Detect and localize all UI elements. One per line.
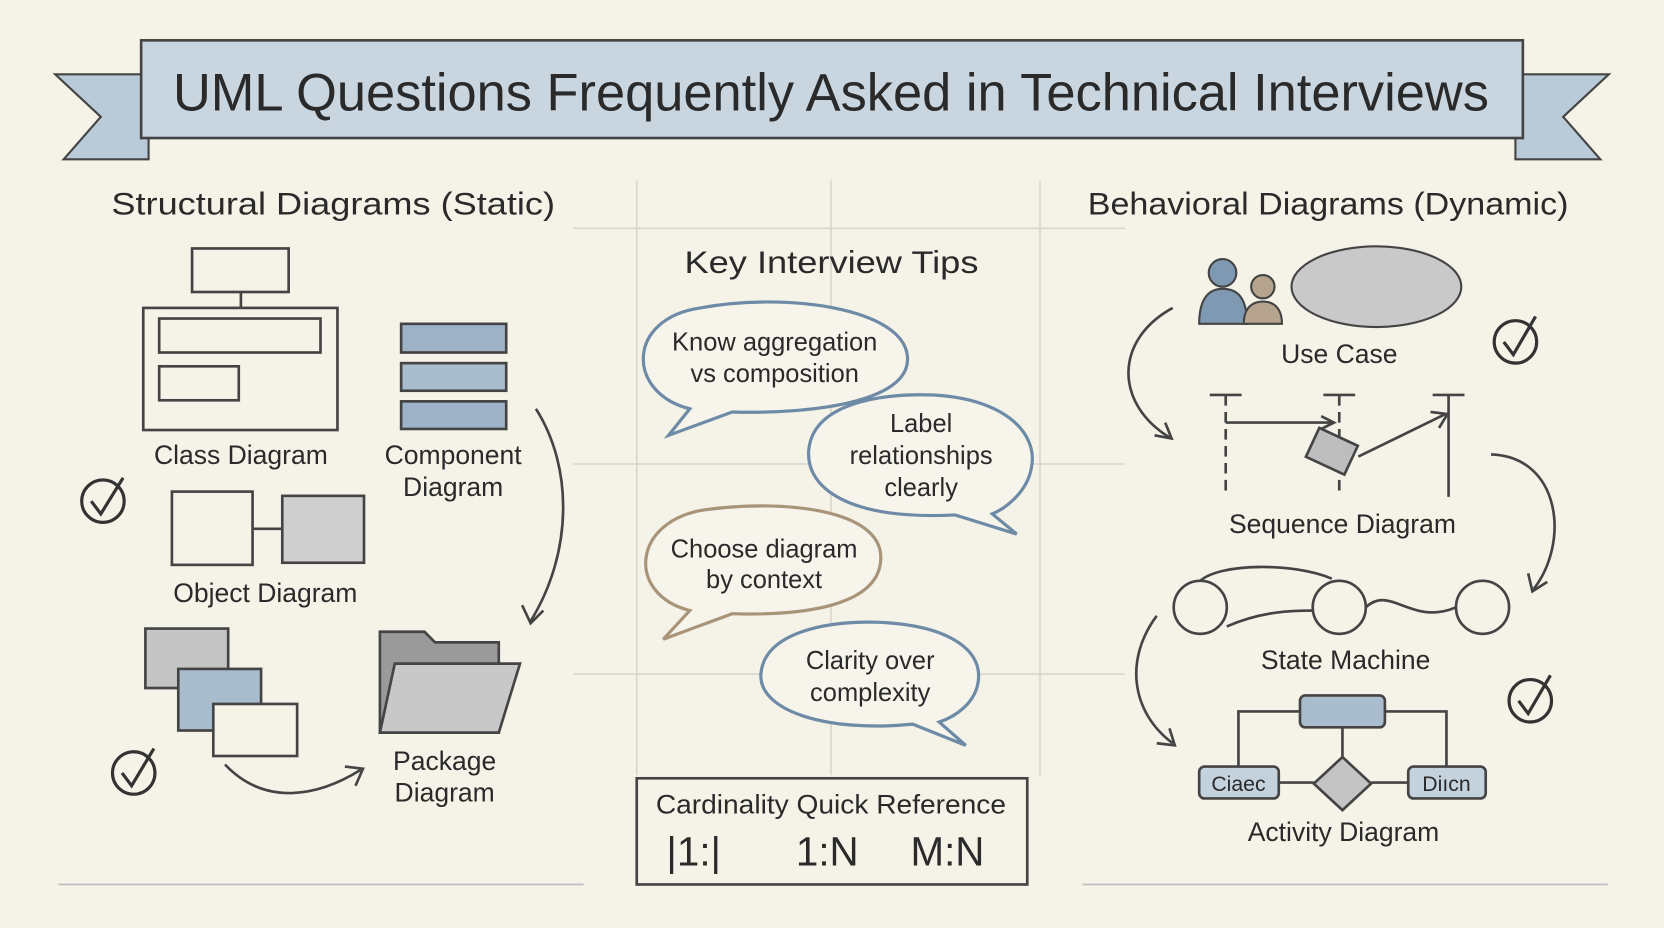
activity diagram: Diıcn [1422, 773, 1471, 796]
tip bubbles [643, 302, 1032, 745]
tip bubbles: Clarity over [806, 647, 935, 675]
cardinality box: |1:| [666, 828, 721, 874]
sequence diagram [1210, 395, 1464, 539]
package label [393, 746, 496, 808]
tip bubbles: vs composition [690, 360, 859, 388]
arrows right [1128, 308, 1555, 745]
activity diagram [1199, 695, 1486, 847]
icon: check [82, 478, 124, 522]
sequence diagram: Sequence Diagram [1229, 509, 1456, 539]
tip bubbles: by context [706, 566, 822, 594]
heading: tips: Key Interview Tips [684, 244, 978, 280]
cardinality box: 1:N [796, 828, 859, 874]
component diagram: Component [385, 440, 522, 470]
object diagram [172, 492, 364, 608]
tip bubbles: Label [890, 410, 952, 438]
package label: Diagram [395, 778, 495, 808]
activity diagram: Activity Diagram [1248, 817, 1439, 847]
package stack [145, 629, 297, 756]
use case: Use Case [1281, 339, 1397, 369]
arrows left [225, 409, 563, 793]
tip bubbles: complexity [810, 679, 931, 707]
title banner: UML Questions Frequently Asked in Technical Interviews [173, 63, 1489, 122]
component diagram: Diagram [403, 472, 503, 502]
state machine: State Machine [1261, 645, 1430, 675]
heading: behavioral: Behavioral Diagrams (Dynamic) [1088, 185, 1568, 221]
title banner [55, 40, 1609, 159]
icon: folder [380, 632, 520, 733]
package label: Package [393, 746, 496, 776]
icon: check [1494, 316, 1537, 363]
heading: structural: Structural Diagrams (Static) [111, 185, 555, 221]
cardinality box [637, 778, 1027, 884]
state machine [1174, 567, 1509, 675]
class diagram [143, 248, 337, 470]
use case [1199, 246, 1461, 369]
activity diagram: Ciaec [1211, 773, 1266, 796]
tip bubbles: Choose diagram [671, 535, 857, 563]
class diagram: Class Diagram [154, 440, 328, 470]
tip bubbles: clearly [884, 474, 958, 502]
cardinality box: Cardinality Quick Reference [656, 789, 1006, 819]
icon: check [1509, 675, 1552, 722]
object diagram: Object Diagram [173, 578, 357, 608]
tip bubbles: relationships [850, 442, 993, 470]
tip bubbles: Know aggregation [672, 328, 877, 356]
icon: check [112, 749, 155, 794]
component diagram [385, 324, 522, 502]
cardinality box: M:N [911, 828, 984, 874]
